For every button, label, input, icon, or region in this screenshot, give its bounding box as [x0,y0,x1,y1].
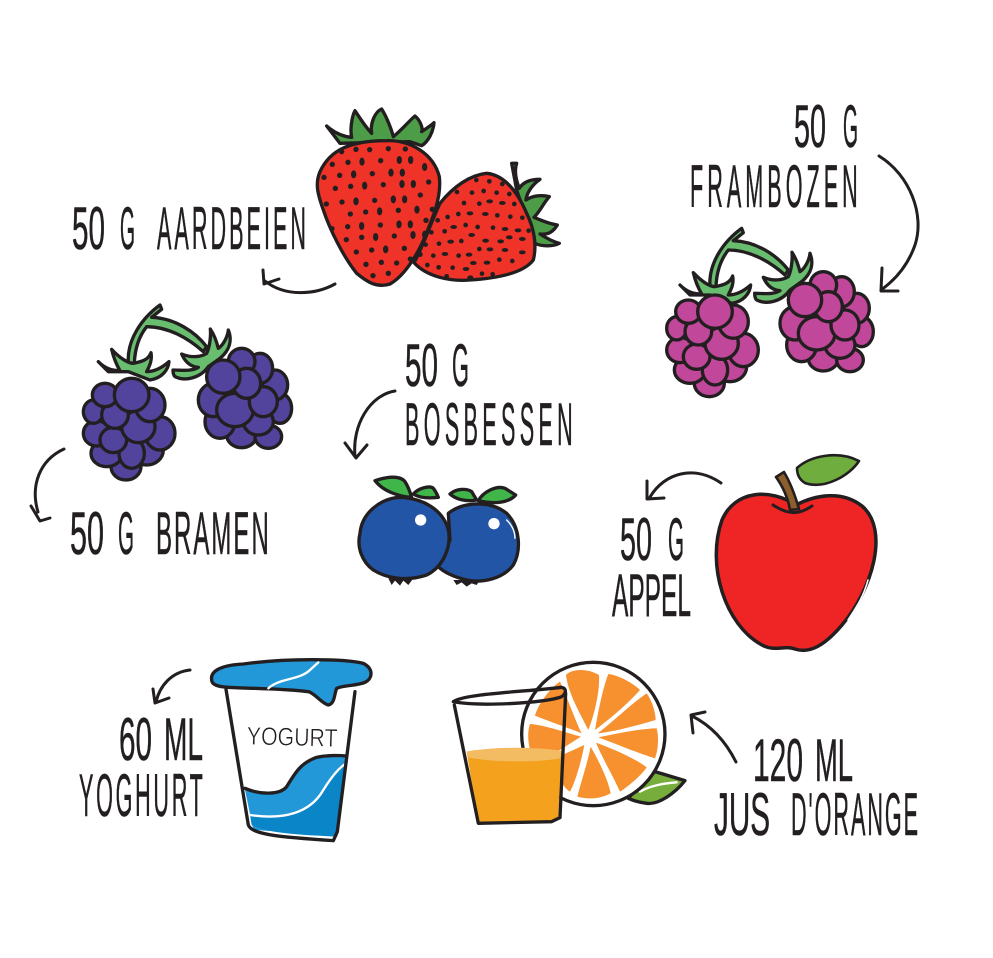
text: ML [164,706,203,773]
label: 50 g bramen [70,500,269,567]
label: 50 g appel [612,506,691,629]
label: 60 ml yoghurt: 60 [119,706,152,773]
label: 50 g bramen: G [118,500,134,567]
text: G [668,506,684,573]
label: 50 g aardbeien: G [120,195,135,262]
icon: raspberries [667,228,873,397]
label: 50 g bosbessen: 50 [405,332,438,399]
label: 50 g bramen: BRAMEN [156,500,269,567]
label: 50 g bosbessen: BOSBESSEN [405,390,573,458]
label: 50 g aardbeien: AARDBEIEN [157,194,306,262]
yogurt text: YOGURT [247,722,338,753]
label: 120 ml jus d'orange [714,727,918,848]
arrow: frambozen [879,156,918,291]
arrow: jus d'orange [691,712,736,762]
arrow: yoghurt [153,670,190,703]
label: 50 g aardbeien [72,194,306,262]
label: 50 g bosbessen: G [452,332,469,399]
label: 120 ml jus d'orange: ML [815,727,853,794]
label: 120 ml jus d'orange: D'ORANGE [791,780,918,848]
text: APPEL [612,562,691,629]
icon: blueberries [359,477,518,587]
icon: yogurt cup [212,660,371,841]
arrow: bosbessen [345,391,395,458]
label: 60 ml yoghurt: YOGHURT [79,761,203,829]
icon: orange and juice glass [453,662,685,823]
label: 50 g aardbeien: 50 [72,195,105,262]
label: 50 g appel: 50 [620,506,652,573]
label: 50 g frambozen: 50 [794,93,826,160]
label: 50 g bosbessen [405,332,573,458]
arrow: bramen [31,449,64,521]
arrow: aardbeien [263,270,335,293]
arrow: appel [647,473,721,499]
icon: strawberries [317,109,559,285]
label: 120 ml jus d'orange: 120 [753,727,803,794]
label: 50 g frambozen [690,93,858,220]
label: 50 g frambozen: FRAMBOZEN [690,152,858,220]
label: 120 ml jus d'orange: JUS [714,781,770,848]
icon: apple [716,455,876,650]
icon: blackberries [83,305,292,480]
label: 60 ml yoghurt [79,706,203,829]
text: G [843,93,858,160]
label: 50 g bramen: 50 [70,500,104,567]
